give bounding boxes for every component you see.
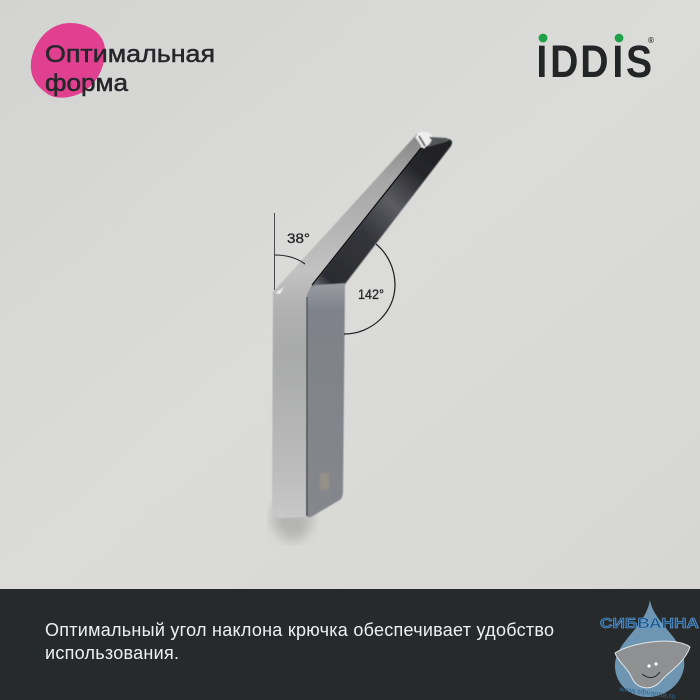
hook shadow (272, 505, 314, 542)
pink blob (31, 23, 105, 98)
hook dark front plate (306, 283, 345, 517)
hook dark arm face (307, 139, 452, 297)
arc (274, 255, 305, 264)
description text: использования. (45, 643, 179, 663)
angle annotation 38 degrees (274, 213, 310, 290)
title: Оптимальная (45, 41, 215, 68)
hook dark edge line (312, 148, 421, 285)
description text: Оптимальный угол наклона крючка обеспечивает удобство (45, 620, 554, 640)
angle annotation 142 degrees (344, 244, 395, 334)
arc (344, 244, 395, 334)
drop (615, 600, 684, 697)
logo registered mark: ® (648, 36, 654, 45)
label: 38° (287, 231, 310, 246)
engraved mini logo (320, 473, 329, 490)
hook tip highlight (415, 132, 433, 149)
hook product photo (272, 132, 452, 542)
tub face (647, 664, 651, 668)
hook silver body (272, 134, 422, 518)
hook edge line (306, 297, 308, 516)
logo green dots (539, 34, 547, 42)
label: 142° (358, 287, 384, 302)
wall bright spot (275, 287, 284, 294)
watermark name: СИБВАННА (600, 615, 699, 632)
vertical reference line (274, 213, 276, 290)
iddis logo (536, 34, 654, 87)
bottom band (0, 589, 700, 700)
logo wordmark: IDDIS (536, 36, 652, 87)
tub (615, 641, 690, 688)
title: форма (45, 70, 129, 97)
watermark logo (600, 600, 699, 700)
